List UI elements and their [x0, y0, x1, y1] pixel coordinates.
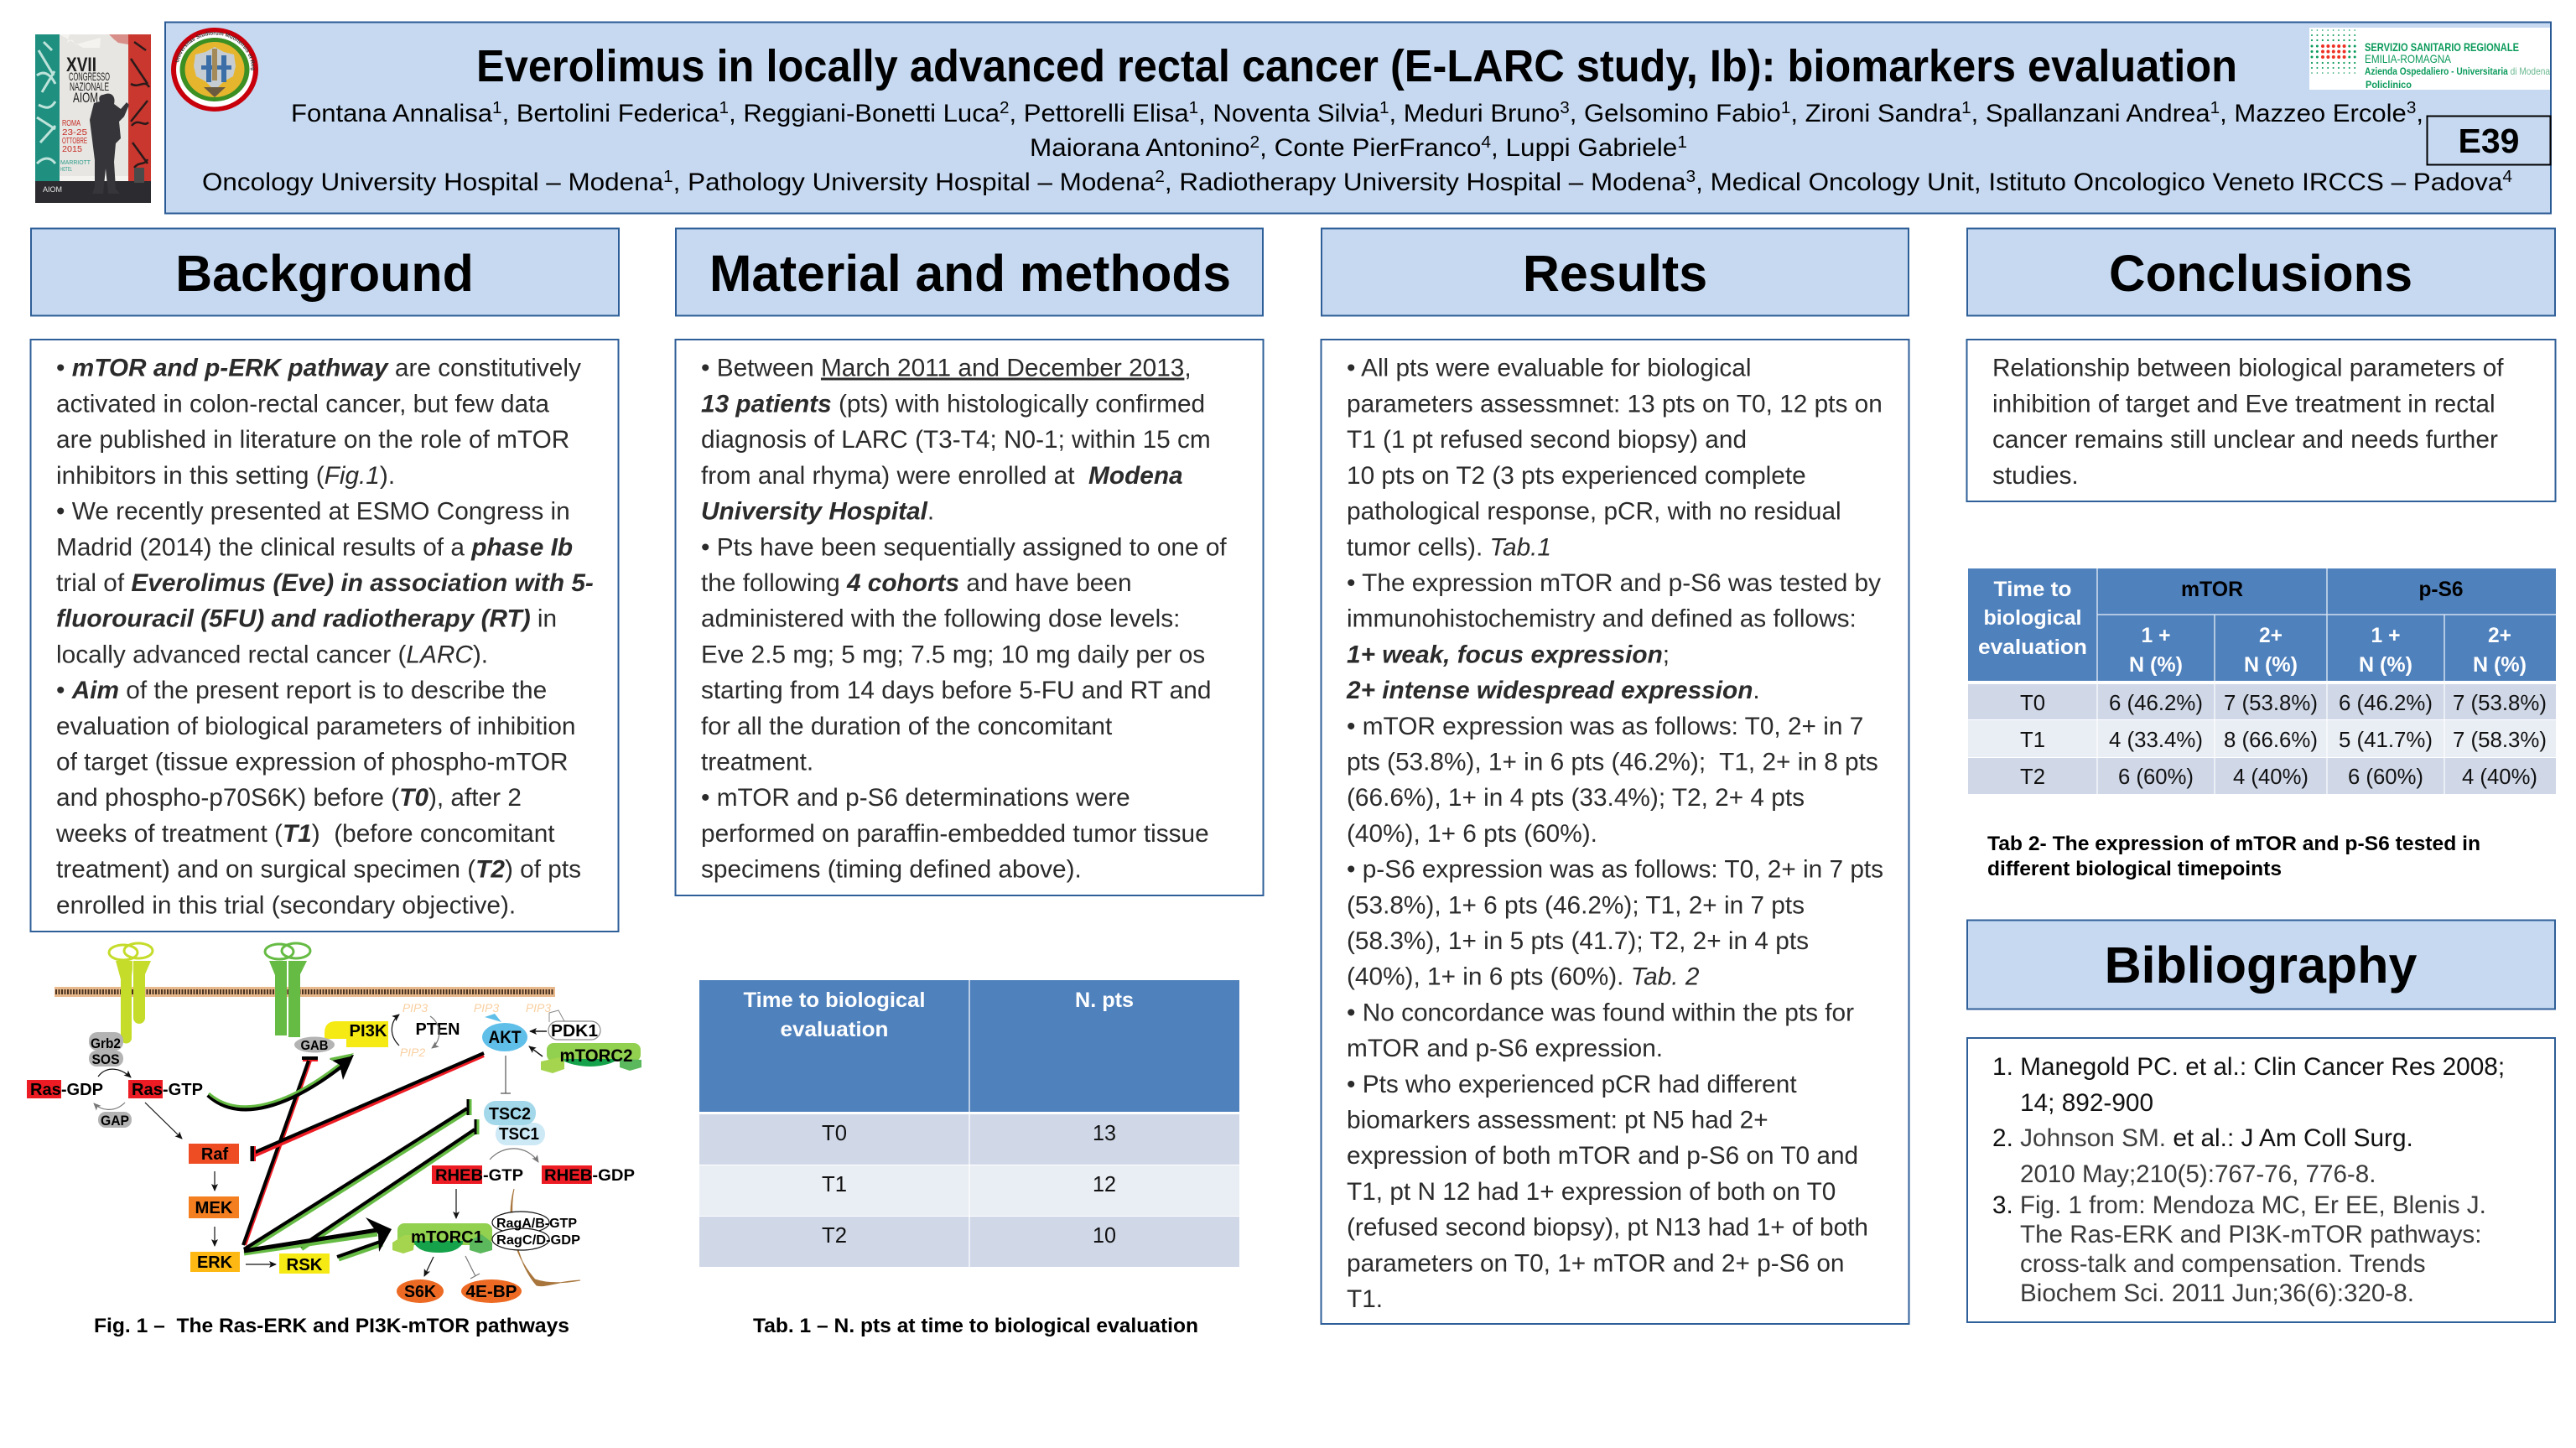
text block: methods: diagnosis of LARC (T3-T4; N0-1; within 15 cm — [701, 426, 1211, 454]
rapamycin-like tail — [511, 1189, 580, 1286]
text block: background: Everolimus (Eve) in association with 5- — [131, 569, 594, 597]
text block: results: expression of both mTOR and p-S6 on T0 and — [1347, 1142, 1858, 1170]
text block: background: are published in literature on the role of mTOR — [56, 426, 569, 454]
text block: results: pathological response, pCR, with no residual — [1347, 498, 1841, 526]
inhibition RSK to TSC1 — [300, 1119, 478, 1249]
regional health service logo: Azienda Ospedaliero - Universitaria di Modena — [2365, 65, 2550, 77]
regional health service logo: SERVIZIO SANITARIO REGIONALE — [2365, 40, 2519, 54]
text block: references — [1967, 1038, 2555, 1322]
text block: results: • No concordance was found within the pts for — [1347, 999, 1854, 1026]
table 2: mTOR and p-S6 expression: 7 (58.3%) — [2453, 727, 2547, 752]
text block: background: T2) of pts — [475, 856, 581, 884]
table 2: mTOR and p-S6 expression: 7 (53.8%) — [2453, 690, 2547, 715]
text block: background: T0), after 2 — [399, 784, 522, 812]
chart: Ras-ERK and PI3K-mTOR pathway diagram — [27, 943, 641, 1303]
panel: results — [1322, 228, 1909, 1324]
authors line 1: 2 — [1000, 99, 1010, 117]
figure 1 caption: Fig. 1 – The Ras-ERK and PI3K-mTOR pathways — [94, 1315, 569, 1337]
Ras-GDP: Ras-GDP — [30, 1081, 103, 1099]
table 1: patients per timepoint: T1 — [822, 1171, 847, 1196]
panel: conclusions — [1967, 228, 2556, 501]
congress poster image: 2015 — [62, 145, 82, 154]
RagA/B and RagC/D: RagC/D-GDP — [496, 1233, 580, 1248]
text block: methods: starting from 14 days before 5-FU and RT and — [701, 677, 1211, 704]
affiliations: 3 — [1686, 168, 1696, 186]
text block: background: mTOR and p-ERK pathway are constitutively — [72, 354, 581, 382]
table 1: patients per timepoint: Time to biological — [743, 989, 926, 1012]
authors line 1: , Zironi Sandra — [1790, 100, 1961, 127]
AKT: PIP3 — [474, 1001, 499, 1015]
poster number E39: E39 — [2459, 122, 2519, 160]
text block: results: T1. — [1347, 1285, 1383, 1313]
congress poster image: MARRIOTT — [60, 160, 91, 166]
table 2: mTOR and p-S6 expression: 4 (33.4%) — [2109, 727, 2203, 752]
ERK — [190, 1252, 240, 1272]
text block: references: 14; 892-900 — [2020, 1089, 2153, 1117]
text block: results: immunohistochemistry and defined as follows: — [1347, 605, 1857, 633]
authors line 1: 3 — [2407, 99, 2416, 117]
title: Everolimus in locally advanced rectal cancer (E-LARC study, Ib): biomarkers evaluation — [476, 41, 2237, 91]
table 1: patients per timepoint — [699, 980, 1239, 1267]
text block: background: activated in colon-rectal cancer, but few data — [56, 391, 549, 418]
GAB and PI3K: GAB — [300, 1039, 329, 1053]
table 2 caption: Tab 2- The expression of mTOR and p-S6 tested in — [1987, 833, 2480, 855]
congress poster image: NAZIONALE — [70, 80, 109, 93]
text block: background — [30, 340, 619, 932]
table 2: mTOR and p-S6 expression: T0 — [2020, 690, 2045, 715]
text block: references: 2. — [1992, 1124, 2020, 1152]
S6K: S6K — [404, 1283, 437, 1301]
university seal logo — [171, 28, 258, 112]
table 2: mTOR and p-S6 expression: 5 (41.7%) — [2339, 727, 2433, 752]
text block: methods: for all the duration of the concomitant — [701, 713, 1113, 740]
text block: references: Biochem Sci. 2011 Jun;36(6):320-8. — [2020, 1279, 2414, 1307]
receptor: yellow-green — [109, 943, 153, 1043]
heading: conclusions: Conclusions — [2109, 245, 2412, 302]
congress poster image: OTTOBRE — [62, 137, 87, 146]
RSK: RSK — [287, 1256, 323, 1274]
text block: methods: treatment. — [701, 748, 813, 776]
heading: results — [1322, 228, 1909, 315]
text block: methods: administered with the following dose levels: — [701, 605, 1180, 633]
header banner — [165, 22, 2551, 213]
text block: references: Johnson SM. et al.: J Am Coll Surg. — [2020, 1124, 2413, 1152]
text block: results: T1, pt N 12 had 1+ expression of both on T0 — [1347, 1178, 1836, 1206]
authors line 1: , Spallanzani Andrea — [1971, 100, 2210, 127]
congress poster image: ROMA — [62, 119, 80, 128]
text block: methods: Modena — [1088, 462, 1183, 490]
RagA/B and RagC/D: RagA/B-GTP — [496, 1217, 577, 1231]
text block: results: • All pts were evaluable for biological — [1347, 354, 1751, 382]
text block: background: Madrid (2014) the clinical results of a — [56, 533, 471, 561]
panel: material and methods — [676, 228, 1263, 895]
text block: methods: from anal rhyma) were enrolled at — [701, 462, 1088, 490]
inhibition ERK to TSC2 — [244, 1099, 470, 1252]
heading: results: Results — [1523, 245, 1707, 302]
text block: background: and phospho-p70S6K) before ( — [56, 784, 399, 812]
text block: background: • We recently presented at ESMO Congress in — [56, 498, 570, 526]
authors line 1: , Reggiani-Bonetti Luca — [729, 100, 1000, 127]
authors line 2: 2 — [1250, 133, 1259, 152]
affiliations: 4 — [2502, 168, 2512, 186]
text block: conclusions: cancer remains still unclear and needs further — [1992, 426, 2498, 454]
receptor: green — [265, 943, 310, 1037]
Ras-GTP: Ras-GTP — [132, 1081, 203, 1099]
regional health service logo — [2309, 28, 2550, 91]
table 1: patients per timepoint: N. pts — [1075, 989, 1134, 1012]
AKT: AKT — [488, 1028, 522, 1047]
authors line 1: 1 — [1961, 99, 1971, 117]
text block: background: evaluation of biological parameters of inhibition — [56, 713, 575, 740]
text block: references: 1. Manegold PC. et al.: Clin Cancer Res 2008; — [1992, 1053, 2505, 1081]
text block: conclusions: studies. — [1992, 462, 2079, 490]
regional health service logo: EMILIA-ROMAGNA — [2365, 52, 2452, 65]
authors line 1: 1 — [492, 99, 502, 117]
table 2: mTOR and p-S6 expression: 6 (60%) — [2118, 764, 2194, 789]
PDK1: PDK1 — [551, 1022, 598, 1041]
table 2: mTOR and p-S6 expression: 4 (40%) — [2233, 764, 2309, 789]
TSC2 and TSC1: TSC1 — [499, 1125, 539, 1144]
authors line 2: , Conte PierFranco — [1259, 134, 1481, 162]
table 1: patients per timepoint: 10 — [1093, 1222, 1116, 1248]
text block: methods: 4 cohorts and have been — [847, 569, 1132, 597]
table 2 caption — [1987, 833, 2480, 880]
table 1: patients per timepoint: evaluation — [780, 1018, 889, 1041]
text block: results — [1322, 340, 1909, 1324]
text block: background: Fig.1). — [325, 462, 395, 490]
PTEN cycle: PIP2 — [400, 1046, 425, 1059]
table 2: mTOR and p-S6 expression: 2+ — [2488, 624, 2511, 647]
text block: background: Aim of the present report is to describe the — [72, 677, 547, 704]
table 2: mTOR and p-S6 expression: biological — [1984, 606, 2081, 630]
mTORC1: mTORC1 — [411, 1228, 483, 1247]
authors line 2: Maiorana Antonino — [1030, 134, 1239, 162]
PTEN cycle — [392, 1001, 460, 1059]
table 1: patients per timepoint: 13 — [1093, 1120, 1116, 1145]
poster number E39 — [2427, 116, 2551, 164]
table 2: mTOR and p-S6 expression: T1 — [2020, 727, 2045, 752]
text block: results: parameters assessmnet: 13 pts on T0, 12 pts on — [1347, 391, 1883, 418]
table 1: patients per timepoint: T0 — [822, 1120, 847, 1145]
authors line 1: 1 — [1379, 99, 1389, 117]
text block: background: locally advanced rectal cancer ( — [56, 641, 406, 668]
panel: bibliography — [1967, 921, 2555, 1322]
ERK: ERK — [197, 1253, 233, 1272]
text block: methods: • mTOR and p-S6 determinations were — [701, 784, 1130, 812]
heading: background: Background — [175, 245, 474, 302]
text block: references: 3. — [1992, 1191, 2020, 1219]
TSC2 and TSC1: TSC2 — [489, 1105, 531, 1124]
panel: background — [30, 228, 619, 932]
authors line 1: , — [2416, 100, 2423, 127]
text block: results: . — [1753, 677, 1760, 704]
text block: methods: . — [927, 498, 934, 526]
TSC2 and TSC1 — [484, 1101, 545, 1145]
authors line 1: 1 — [1189, 99, 1198, 117]
text block: methods: performed on paraffin-embedded tumor tissue — [701, 820, 1209, 848]
table 2: mTOR and p-S6 expression: 6 (46.2%) — [2109, 690, 2203, 715]
text block: methods: Eve 2.5 mg; 5 mg; 7.5 mg; 10 mg daily per os — [701, 641, 1205, 668]
authors line 2: 1 — [1677, 133, 1687, 152]
affiliations: , Medical Oncology Unit, Istituto Oncologico Veneto IRCCS – Padova — [1696, 169, 2503, 196]
mTORC2: mTORC2 — [560, 1046, 632, 1066]
text block: results: ; — [1663, 641, 1670, 668]
PTEN cycle: PIP3 — [402, 1001, 428, 1015]
table 1: patients per timepoint: T2 — [822, 1222, 847, 1248]
authors line 1: 1 — [1781, 99, 1790, 117]
Raf: Raf — [201, 1145, 228, 1164]
AKT: PIP3 — [526, 1001, 551, 1015]
text block: references: The Ras-ERK and PI3K-mTOR pathways: — [2020, 1221, 2481, 1248]
text block: background: trial of — [56, 569, 131, 597]
AKT — [474, 1001, 551, 1051]
affiliations: , Pathology University Hospital – Modena — [673, 169, 1156, 196]
authors line 1: , Meduri Bruno — [1389, 100, 1560, 127]
table 2: mTOR and p-S6 expression: T2 — [2020, 764, 2045, 789]
authors line 1: , Noventa Silvia — [1198, 100, 1379, 127]
text block: results: Tab.1 — [1490, 533, 1551, 561]
text block: methods: 13 patients — [701, 391, 832, 418]
table 2: mTOR and p-S6 expression: N (%) — [2129, 653, 2183, 677]
text block: results: (40%), 1+ 6 pts (60%). — [1347, 820, 1597, 848]
cell membrane — [55, 987, 555, 997]
table 2: mTOR and p-S6 expression: 4 (40%) — [2462, 764, 2537, 789]
authors line 1: Fontana Annalisa — [291, 100, 486, 127]
text block: methods: • Pts have been sequentially assigned to one of — [701, 533, 1227, 561]
mTORC2 — [541, 1043, 641, 1073]
text block: background: phase Ib — [470, 533, 573, 561]
text block: results: (66.6%), 1+ in 4 pts (33.4%); T2, 2+ 4 pts — [1347, 784, 1805, 812]
authors line 1: , Pettorelli Elisa — [1010, 100, 1189, 127]
authors line 1: 1 — [2210, 99, 2220, 117]
text block: results: Tab. 2 — [1631, 963, 1700, 991]
inhibition ERK to GAB — [243, 1058, 318, 1245]
text block: results: biomarkers assessment: pt N5 had 2+ — [1347, 1107, 1768, 1134]
congress poster image: AIOM — [43, 185, 62, 194]
table 1: patients per timepoint: 12 — [1093, 1171, 1116, 1196]
Grb2 and SOS — [89, 1032, 123, 1067]
text block: background: weeks of treatment ( — [55, 820, 283, 848]
text block: conclusions: Relationship between biological parameters of — [1992, 354, 2504, 382]
text block: background: inhibitors in this setting ( — [56, 462, 325, 490]
text block: results: (53.8%), 1+ 6 pts (46.2%); T1, 2+ in 7 pts — [1347, 891, 1805, 919]
heading: background — [31, 228, 619, 315]
RSK — [279, 1253, 330, 1274]
text block: results: pts (53.8%), 1+ in 6 pts (46.2%); T1, 2+ in 8 pts — [1347, 748, 1878, 776]
heading: conclusions — [1967, 228, 2555, 315]
text block: methods: University Hospital — [701, 498, 928, 526]
table 2: mTOR and p-S6 expression: 6 (60%) — [2348, 764, 2423, 789]
text block: results: 10 pts on T2 (3 pts experienced complete — [1347, 462, 1806, 490]
text block: results: • mTOR expression was as follows: T0, 2+ in 7 — [1347, 713, 1863, 740]
affiliations: 1 — [663, 168, 673, 186]
text block: results: (58.3%), 1+ in 5 pts (41.7); T2, 2+ in 4 pts — [1347, 927, 1809, 955]
text block: background: in — [538, 605, 557, 633]
authors line 2: 4 — [1481, 133, 1491, 152]
text block: background: of target (tissue expression of phospho-mTOR — [56, 748, 569, 776]
table 2: mTOR and p-S6 expression: Time to — [1994, 578, 2071, 601]
regional health service logo: Policlinico — [2366, 79, 2412, 91]
text block: background: treatment) and on surgical specimen ( — [56, 856, 475, 884]
text block: background: enrolled in this trial (secondary objective). — [56, 891, 516, 919]
authors line 1: , Mazzeo Ercole — [2220, 100, 2407, 127]
affiliations: Oncology University Hospital – Modena — [202, 169, 642, 196]
text block: results: • p-S6 expression was as follows: T0, 2+ in 7 pts — [1347, 856, 1883, 884]
4E-BP: 4E-BP — [466, 1283, 517, 1301]
text block: references: Fig. 1 from: Mendoza MC, Er EE, Blenis J. — [2020, 1191, 2486, 1219]
RHEB-GTP: RHEB-GTP — [435, 1167, 523, 1185]
heading: bibliography — [1967, 921, 2555, 1009]
table 2: mTOR and p-S6 expression: 1 + — [2142, 624, 2170, 647]
MEK — [189, 1196, 239, 1218]
text block: results: (40%), 1+ in 6 pts (60%). — [1347, 963, 1631, 991]
Grb2 and SOS: Grb2 — [91, 1035, 121, 1051]
text block: background: • — [56, 354, 72, 382]
table 2: mTOR and p-S6 expression: mTOR — [2181, 578, 2243, 601]
text block: background: T1) (before concomitant — [283, 820, 555, 848]
table 2: mTOR and p-S6 expression: evaluation — [1978, 636, 2087, 659]
text block: methods: March 2011 and December 2013, — [821, 354, 1192, 382]
table 2: mTOR and p-S6 expression: N (%) — [2244, 653, 2298, 677]
affiliations: , Radiotherapy University Hospital – Modena — [1165, 169, 1686, 196]
authors line 2: , Luppi Gabriele — [1491, 134, 1677, 162]
table 2: mTOR and p-S6 expression: 6 (46.2%) — [2339, 690, 2433, 715]
text block: results: tumor cells). — [1347, 533, 1490, 561]
table 2: mTOR and p-S6 expression: 8 (66.6%) — [2224, 727, 2318, 752]
Grb2 and SOS: SOS — [92, 1051, 119, 1067]
text block: results: (refused second biopsy), pt N13 had 1+ of both — [1347, 1214, 1868, 1242]
table 2: mTOR and p-S6 expression: N (%) — [2359, 653, 2412, 677]
MEK: MEK — [195, 1199, 233, 1217]
congress poster image — [35, 34, 151, 203]
PDK1 — [548, 1010, 600, 1041]
table 2: mTOR and p-S6 expression — [1968, 568, 2556, 794]
table 1 caption: Tab. 1 – N. pts at time to biological evaluation — [753, 1315, 1198, 1337]
table 2: mTOR and p-S6 expression: p-S6 — [2418, 578, 2464, 601]
authors line 1: , Bertolini Federica — [502, 100, 719, 127]
text block: background: fluorouracil (5FU) and radiotherapy (RT) — [56, 605, 531, 633]
text block: results: parameters on T0, 1+ mTOR and 2+ p-S6 on — [1347, 1249, 1845, 1277]
text block: methods — [676, 340, 1263, 895]
text block: results: • The expression mTOR and p-S6 was tested by — [1347, 569, 1881, 597]
text block: methods: • Between — [701, 354, 821, 382]
text block: results: • Pts who experienced pCR had different — [1347, 1071, 1797, 1098]
authors line 1: , Gelsomino Fabio — [1570, 100, 1781, 127]
GAB and PI3K — [294, 1021, 388, 1053]
text block: methods: (pts) with histologically confirmed — [839, 391, 1205, 418]
Raf — [189, 1144, 239, 1164]
text block: background: LARC). — [406, 641, 488, 668]
text block: references: 2010 May;210(5):767-76, 776-8. — [2020, 1160, 2376, 1188]
text block: references: cross-talk and compensation. Trends — [2020, 1250, 2426, 1278]
text block: results: 2+ intense widespread expression — [1346, 677, 1753, 704]
table 2 caption: different biological timepoints — [1987, 858, 2282, 880]
text block: background: • — [56, 677, 72, 704]
table 2: mTOR and p-S6 expression: 1 + — [2371, 624, 2400, 647]
congress poster image: XVII — [66, 54, 96, 76]
text block: results: 1+ weak, focus expression — [1347, 641, 1663, 668]
congress poster image: HOTEL — [60, 167, 72, 173]
activation arrow Ras to PI3K — [208, 1053, 354, 1109]
PTEN cycle: PTEN — [416, 1020, 460, 1039]
authors line 1: 1 — [719, 99, 729, 117]
4E-BP — [461, 1279, 522, 1303]
GAB and PI3K: PI3K — [349, 1022, 387, 1041]
text block: methods: the following — [701, 569, 847, 597]
text block: methods: specimens (timing defined above). — [701, 856, 1082, 884]
mTORC1 — [392, 1223, 492, 1253]
heading: material and methods: Material and methods — [709, 245, 1231, 302]
heading: material and methods — [676, 228, 1263, 315]
text block: conclusions: inhibition of target and Eve treatment in rectal — [1992, 391, 2496, 418]
RagA/B and RagC/D — [492, 1212, 580, 1250]
text block: results: T1 (1 pt refused second biopsy) and — [1347, 426, 1747, 454]
text block: conclusions — [1967, 340, 2556, 501]
RHEB-GDP: RHEB-GDP — [544, 1167, 635, 1185]
inhibition AKT to Raf — [252, 1053, 484, 1161]
congress poster image: AIOM — [73, 90, 98, 106]
congress poster image: 23-25 — [62, 128, 88, 138]
table 2: mTOR and p-S6 expression: 2+ — [2259, 624, 2283, 647]
table 2: mTOR and p-S6 expression: 7 (53.8%) — [2224, 690, 2318, 715]
table 2: mTOR and p-S6 expression: N (%) — [2473, 653, 2527, 677]
affiliations: 2 — [1155, 168, 1165, 186]
S6K — [397, 1279, 444, 1303]
GAP: GAP — [101, 1113, 129, 1129]
authors line 1: 3 — [1560, 99, 1570, 117]
activation arrows to mTORC1 — [244, 1217, 392, 1259]
text block: results: mTOR and p-S6 expression. — [1347, 1035, 1663, 1062]
heading: bibliography: Bibliography — [2105, 937, 2417, 994]
congress poster image: CONGRESSO — [69, 70, 110, 83]
